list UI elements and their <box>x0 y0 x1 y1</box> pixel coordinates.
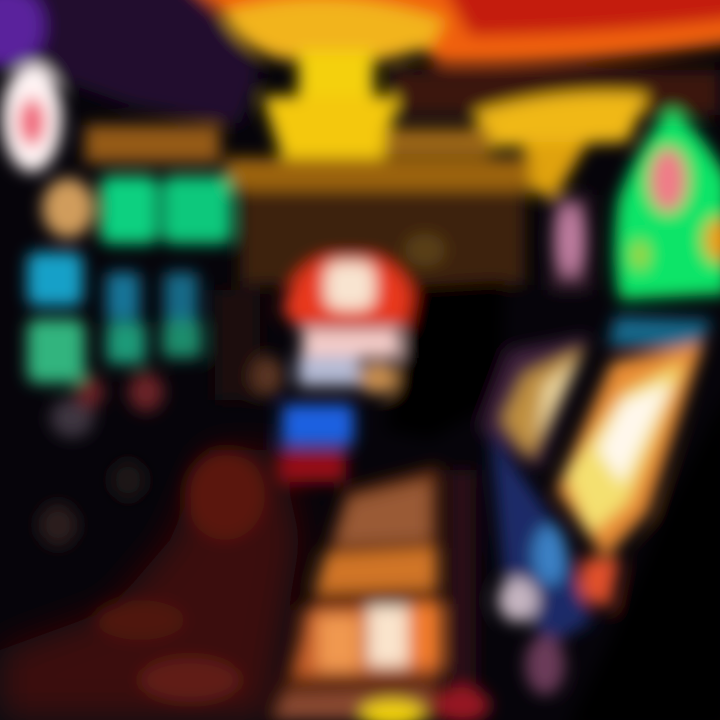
foreground: black wedge at lower right <box>565 385 720 720</box>
column: pink striped post <box>550 195 590 290</box>
ceiling: purple and dark upper area <box>0 0 720 125</box>
left slot machines <box>27 176 232 547</box>
silhouette: dark figure <box>385 280 505 440</box>
ceiling: red and orange arc <box>185 0 720 64</box>
floor: dark red carpet <box>0 450 300 720</box>
center machine: red and white top <box>252 256 420 396</box>
wall: brown back wall <box>215 190 525 400</box>
center machine: blue and red base <box>280 404 354 482</box>
chandelier: right yellow fixture <box>475 92 648 198</box>
right slot row <box>480 316 712 695</box>
aisle: bottom center machines <box>270 465 490 720</box>
sign: white oval at left <box>2 64 62 172</box>
ceiling: golden beams <box>85 125 530 266</box>
sign: green neon at right <box>614 108 720 300</box>
chandelier: central yellow fixture <box>222 0 445 158</box>
